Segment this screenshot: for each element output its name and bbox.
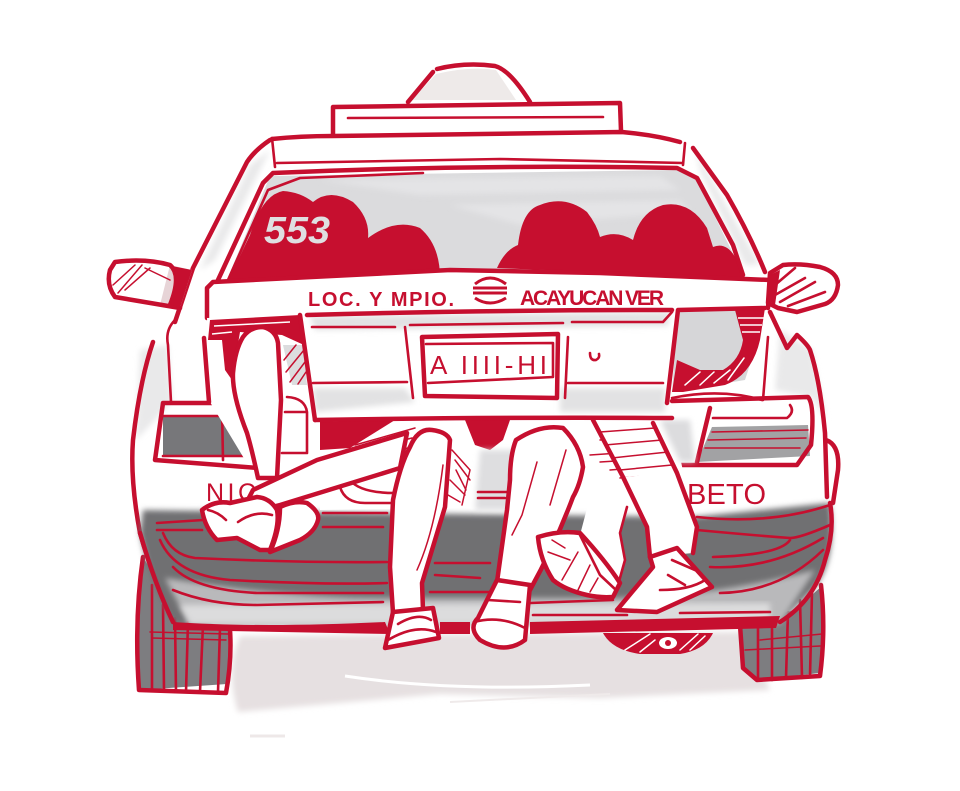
trunk lid [207, 270, 770, 412]
license plate: A IIII-HI [430, 350, 547, 380]
passenger silhouettes [228, 191, 440, 281]
spare wheel under car [603, 633, 713, 654]
roof sign [333, 65, 621, 135]
taxi owner names [206, 479, 766, 511]
leg: back leg under shorts [580, 480, 627, 585]
roof band [272, 132, 680, 142]
roof band sides [272, 138, 685, 167]
trunk lettering: LOC. Y MPIO. [308, 289, 454, 311]
sign dome [412, 69, 516, 100]
ground shadow [232, 632, 770, 736]
leg: far shoe [538, 532, 620, 597]
left taillight [155, 403, 258, 468]
shoe [473, 580, 530, 648]
body washes [136, 150, 826, 440]
trunk lock [590, 353, 599, 360]
license plate [422, 334, 558, 398]
leg: center left [385, 430, 470, 648]
leg: hanging left leg [233, 327, 281, 478]
left body outline [132, 140, 270, 608]
taillights [155, 397, 812, 468]
shorts hatch [448, 450, 470, 505]
sign box [333, 103, 621, 135]
sock foot [202, 497, 278, 550]
emblem [473, 278, 507, 303]
inner left panel line [167, 320, 175, 402]
trunk washes [310, 312, 670, 412]
tires [137, 557, 823, 693]
bumper [140, 503, 832, 634]
leg: right leg in shorts [593, 420, 712, 612]
taxi owner names: BETO [687, 479, 766, 511]
left tire [137, 557, 230, 693]
trunk lid bottom edge [315, 418, 672, 420]
bumper bottom edge [173, 616, 780, 634]
window outline [218, 167, 743, 280]
taxi number: 553 [264, 210, 330, 252]
right taillight [672, 397, 812, 465]
bumper lines [157, 505, 830, 615]
trunk opening right [667, 308, 765, 403]
leg: center right [473, 427, 583, 648]
leg: horizontal left leg with feet [202, 433, 407, 552]
left mirror [109, 261, 192, 308]
trunk interior [315, 418, 695, 510]
shoe [385, 608, 439, 648]
trunk opening left [204, 315, 315, 465]
taxi owner names: NIC [206, 479, 256, 507]
right body outline [693, 148, 838, 503]
second foot [270, 502, 318, 552]
trunk lid: ACAYUCAN VER [520, 287, 664, 310]
rear window [218, 167, 745, 282]
car body [132, 140, 838, 608]
right mirror [768, 264, 838, 312]
sneaker [617, 548, 712, 612]
right tire [740, 585, 823, 680]
